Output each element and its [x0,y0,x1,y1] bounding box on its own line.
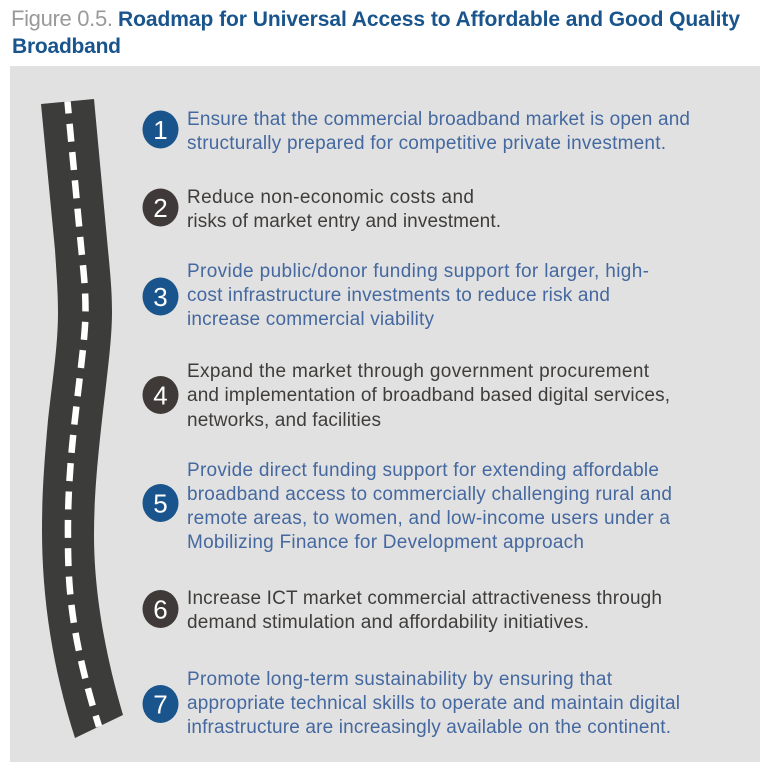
step 2: Reduce non-economic costs and [187,187,474,208]
step 7: 7 [153,690,168,720]
step 5: Mobilizing Finance for Development approach [187,532,584,553]
step 5: broadband access to commercially challenging rural and [187,484,672,505]
step 5: Provide direct funding support for extending affordable [187,460,659,481]
step 7 [142,669,680,738]
step 3: cost infrastructure investments to reduce risk and [187,285,610,306]
step 6: 6 [153,594,168,624]
step 6: Increase ICT market commercial attractiveness through [187,588,662,609]
step 3: 3 [153,282,168,312]
step 7: infrastructure are increasingly available on the continent. [187,717,671,738]
step 5: remote areas, to women, and low-income users under a [187,508,670,529]
step 4: 4 [153,380,168,410]
step 3: Provide public/donor funding support for larger, high- [187,261,649,282]
step 4: networks, and facilities [187,410,381,431]
title: Roadmap for Universal Access to Affordable and Good Quality [118,8,740,31]
step 2 [142,187,501,232]
step 1: 1 [153,115,168,145]
step 7: appropriate technical skills to operate and maintain digital [187,693,680,714]
step 1: structurally prepared for competitive private investment. [187,133,666,154]
step 6 [142,588,662,633]
title: Figure 0.5. [11,6,113,31]
step 3: increase commercial viability [187,309,434,330]
title: Broadband [12,35,121,58]
step 1 [142,109,690,154]
step 5: 5 [153,488,168,518]
title [11,6,740,58]
step 1: Ensure that the commercial broadband market is open and [187,109,690,130]
step 6: demand stimulation and affordability initiatives. [187,612,589,633]
step 4: Expand the market through government procurement [187,361,650,382]
step 4: and implementation of broadband based digital services, [187,385,670,406]
step 7: Promote long-term sustainability by ensuring that [187,669,613,690]
step 4 [142,361,670,431]
step 2: 2 [153,193,168,223]
step 3 [142,261,649,330]
step 5 [142,460,672,553]
icon: winding road [41,99,123,738]
step 2: risks of market entry and investment. [187,211,501,232]
